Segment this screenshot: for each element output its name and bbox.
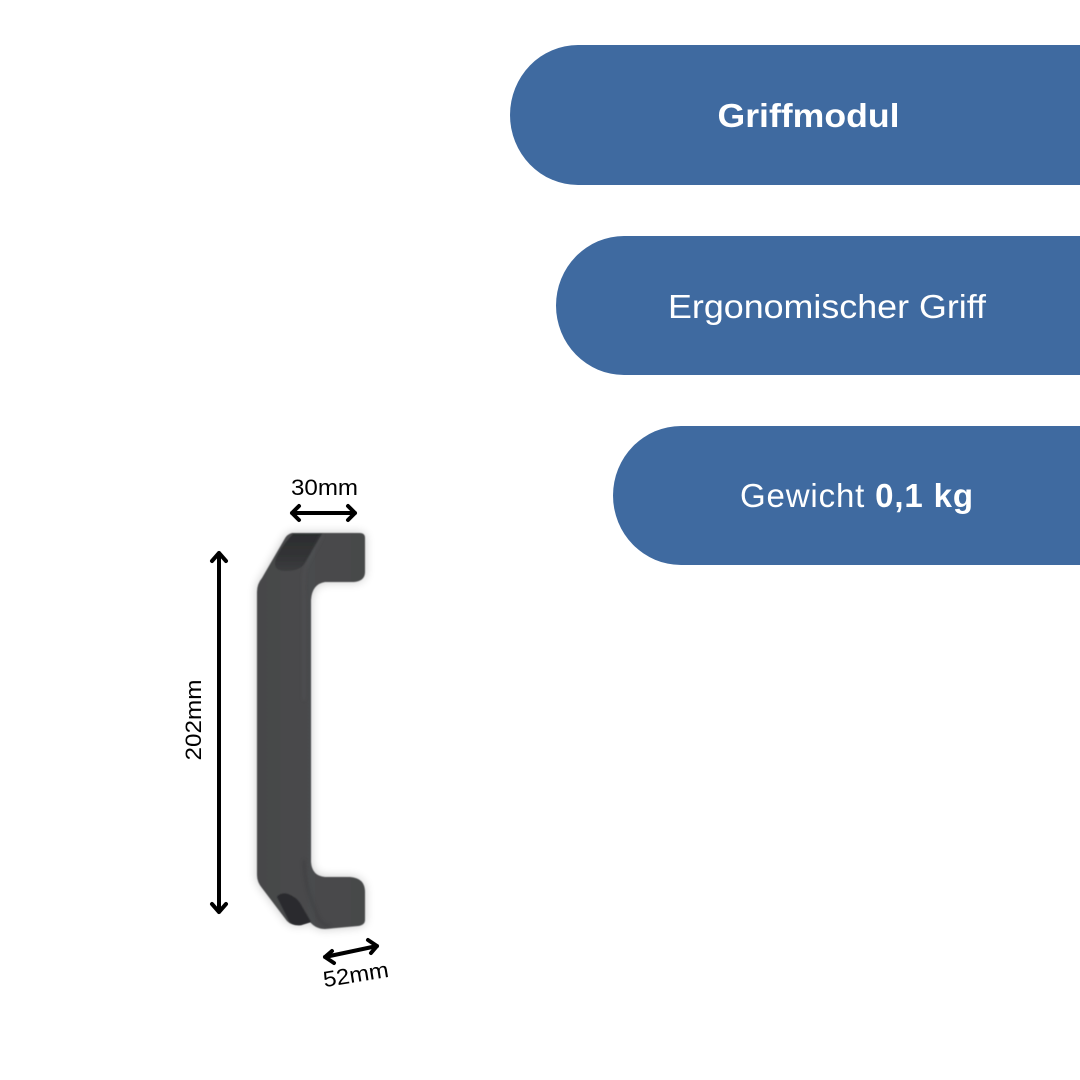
label: 52mm: 52mm (321, 957, 390, 992)
pill: Gewicht (613, 426, 1080, 565)
top ridge shading (304, 535, 322, 700)
product: ergonomic handle (257, 533, 365, 929)
top recess (275, 534, 322, 571)
bottom recess (277, 893, 311, 925)
label: 30mm: 30mm (291, 475, 358, 500)
text: Gewicht 0,1 kg: Gewicht 0,1 kg (740, 477, 973, 514)
label: 202mm: 202mm (181, 680, 206, 760)
arrow: 202mm height (212, 553, 226, 912)
heading: Griffmodul: Griffmodul (718, 97, 900, 134)
arrow: 30mm width (292, 506, 355, 520)
pill: Griffmodul (510, 45, 1080, 185)
pill: Ergonomischer Griff (556, 236, 1080, 375)
arrow: 52mm depth (325, 940, 377, 963)
bottom ridge shading (304, 860, 330, 926)
text: Ergonomischer Griff: Ergonomischer Griff (668, 288, 987, 325)
